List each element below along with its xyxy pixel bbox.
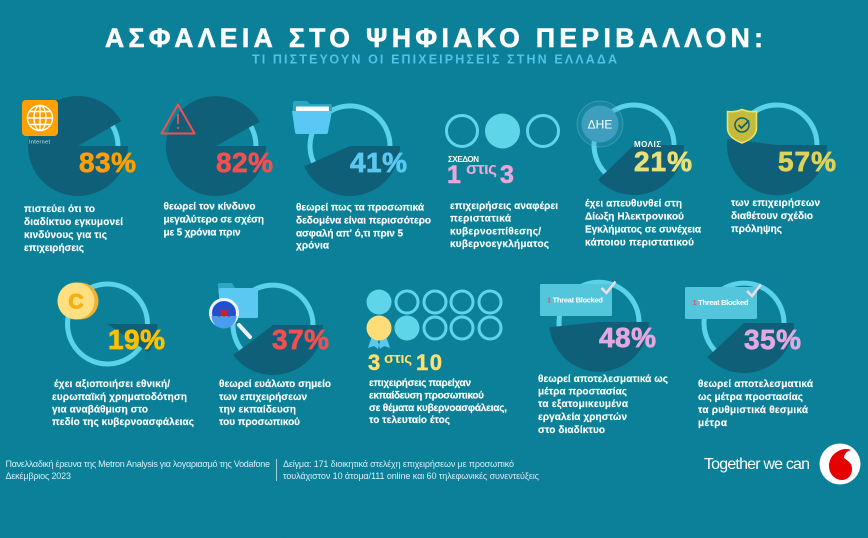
- description: [296, 202, 431, 252]
- panel: 82% risk: [162, 96, 273, 238]
- panel: 83% internet: [22, 96, 136, 254]
- icon: coin: [58, 282, 98, 320]
- panel: 57% plan: [727, 105, 836, 235]
- value 1 in 3: 3: [500, 161, 514, 189]
- panel: 1 in 3: [446, 114, 558, 250]
- description: χρόνια: [296, 240, 330, 252]
- footer: survey source: [6, 459, 270, 481]
- value 1 in 3: στις: [466, 159, 497, 178]
- description: θεωρεί αποτελεσματικά: [698, 379, 814, 390]
- description: πρόληψης: [731, 224, 782, 235]
- icon: coin: C: [68, 290, 84, 314]
- description: δεδομένα είναι περισσότερο: [296, 216, 431, 226]
- description: επιχειρήσεις παρείχαν: [369, 378, 471, 389]
- description: έχει αξιοποιήσει εθνική/: [54, 379, 170, 390]
- slogan: Together we can: [704, 456, 810, 473]
- value 21%: ΜΟΛΙΣ: [634, 140, 661, 149]
- description: θεωρεί ευάλωτο σημείο: [219, 379, 331, 390]
- icon: threat blocked card: 1 Threat Blocked: [692, 298, 749, 307]
- description: [450, 201, 558, 250]
- description: ευρωπαϊκή χρηματοδότηση: [52, 392, 187, 403]
- pie chart 83%: [28, 96, 128, 196]
- description: θεωρεί πως τα προσωπικά: [296, 202, 425, 214]
- description: σε θέματα κυβερνοασφάλειας,: [369, 403, 507, 414]
- description: Δίωξη Ηλεκτρονικού: [585, 212, 684, 222]
- pie chart 82%: [166, 96, 266, 196]
- description: [731, 198, 820, 235]
- pie chart 37%: [233, 285, 323, 375]
- pie chart 19%: [68, 284, 158, 364]
- description: επιχειρήσεις αναφέρει: [450, 201, 558, 212]
- pie chart 57%: [727, 105, 827, 195]
- panel: 35% regulation: [685, 283, 814, 429]
- description: [585, 198, 702, 248]
- description: τα εξατομικευμένα: [538, 399, 629, 410]
- logo: vodafone: [820, 444, 860, 484]
- description: [698, 379, 814, 429]
- description: ως μέτρα προστασίας: [698, 392, 803, 403]
- pie chart 48%: [549, 282, 649, 372]
- description: επιχειρήσεις: [24, 243, 84, 254]
- pie chart 41%: [304, 106, 400, 196]
- description: του προσωπικού: [219, 417, 300, 428]
- description: κυβερνοεγκλήματος: [450, 239, 549, 250]
- description: τα ρυθμιστικά θεσμικά: [698, 405, 809, 416]
- description: για αναβάθμιση στο: [52, 404, 148, 416]
- value 1 in 3: [447, 155, 514, 189]
- icon: internet globe: [22, 100, 58, 146]
- value 35%: 35%: [744, 324, 801, 355]
- icon: folder: [292, 101, 332, 134]
- subtitle: ΤΙ ΠΙΣΤΕΥΟΥΝ ΟΙ ΕΠΙΧΕΙΡΗΣΕΙΣ ΣΤΗΝ ΕΛΛΑΔΑ: [252, 52, 617, 66]
- value 82%: 82%: [216, 147, 273, 178]
- description: έχει απευθυνθεί στη: [585, 198, 682, 210]
- value 48%: 48%: [599, 322, 656, 353]
- description: με 5 χρόνια πριν: [164, 228, 241, 238]
- icon: ΔΗΕ badge: ΔΗΕ: [588, 118, 612, 132]
- value 3 in 10: 3: [368, 350, 380, 375]
- description: την εκπαίδευση: [219, 404, 296, 416]
- description: [24, 204, 123, 254]
- footer: sample note: τουλάχιστον 10 άτομα/111 online και 60 τηλεφωνικές συνεντεύξεις: [283, 471, 540, 481]
- description: [52, 379, 194, 428]
- value 57%: 57%: [778, 146, 836, 177]
- description: των επιχειρήσεων: [731, 198, 820, 209]
- description: θεωρεί τον κίνδυνο: [164, 202, 256, 212]
- icon: threat blocked card: [540, 282, 616, 316]
- description: μέτρα προστασίας: [538, 386, 627, 398]
- pie chart 35%: [704, 283, 794, 373]
- value 19%: 19%: [108, 324, 165, 355]
- panel: 19% funding: [52, 282, 194, 428]
- description: ασφαλή απ' ό,τι πριν 5: [296, 228, 403, 240]
- icon: folder with magnifier: [210, 283, 258, 337]
- description: κάποιου περιστατικού: [585, 238, 694, 248]
- panel: 48% tools: [538, 282, 668, 436]
- title: ΑΣΦΑΛΕΙΑ ΣΤΟ ΨΗΦΙΑΚΟ ΠΕΡΙΒΑΛΛΟΝ:: [105, 23, 763, 53]
- footer: sample note: [283, 459, 540, 481]
- value 1 in 3: ΣΧΕΔΟΝ: [448, 155, 479, 164]
- description: εκπαίδευση προσωπικού: [369, 390, 484, 402]
- description: πεδίο της κυβερνοασφάλειας: [52, 417, 194, 428]
- panel: 21% report: [577, 101, 702, 248]
- value 83%: 83%: [79, 147, 136, 178]
- value 3 in 10: [368, 350, 442, 375]
- footer: sample note: Δείγμα: 171 διοικητικά στελέχη επιχειρήσεων με προσωπικό: [283, 459, 514, 469]
- description: θεωρεί αποτελεσματικά ως: [538, 374, 668, 385]
- value 3 in 10: στις: [384, 350, 412, 367]
- description: κυβερνοεπίθεσης/: [450, 226, 541, 238]
- description: το τελευταίο έτος: [369, 415, 450, 426]
- panel: 41% data: [292, 101, 431, 252]
- description: [538, 374, 668, 436]
- description: πιστεύει ότι το: [24, 204, 95, 215]
- description: εργαλεία χρηστών: [538, 412, 627, 423]
- panel: 37% training weak point: [210, 283, 331, 428]
- value 1 in 3: 1: [447, 161, 461, 189]
- description: των επιχειρήσεων: [219, 392, 307, 403]
- description: [164, 202, 264, 238]
- value 3 in 10: 10: [416, 350, 442, 375]
- icon: threat blocked card: [685, 284, 761, 319]
- description: [369, 378, 507, 426]
- description: μεγαλύτερο σε σχέση: [164, 214, 264, 226]
- icon: ΔΗΕ badge: [577, 101, 623, 147]
- description: Εγκλήματος σε συνέχεια: [585, 224, 702, 236]
- footer: survey source: Πανελλαδική έρευνα της Metron Analysis για λογαριασμό της Vodafone: [6, 459, 270, 469]
- footer: survey source: Δεκέμβριος 2023: [6, 471, 71, 481]
- description: στο διαδίκτυο: [538, 425, 605, 436]
- icon: internet globe: Internet: [29, 140, 50, 146]
- value 41%: 41%: [350, 147, 407, 178]
- description: μέτρα: [698, 418, 728, 429]
- icon: shield: [728, 110, 756, 143]
- value 37%: 37%: [272, 324, 329, 355]
- panel: 3 in 10 training: [366, 290, 507, 426]
- icon: warning triangle: [162, 104, 194, 134]
- pie chart 21%: [594, 105, 684, 195]
- icon: threat blocked card: 1 Threat Blocked: [547, 296, 603, 304]
- value 21%: 21%: [634, 146, 692, 177]
- icon: ten circles: [366, 290, 501, 349]
- description: διαδίκτυο εγκυμονεί: [24, 217, 123, 228]
- description: [219, 379, 331, 428]
- description: κινδύνους για τις: [24, 230, 107, 241]
- description: διαθέτουν σχέδιο: [731, 211, 813, 222]
- icon: three circles: [446, 114, 558, 148]
- description: περιστατικά: [450, 214, 512, 224]
